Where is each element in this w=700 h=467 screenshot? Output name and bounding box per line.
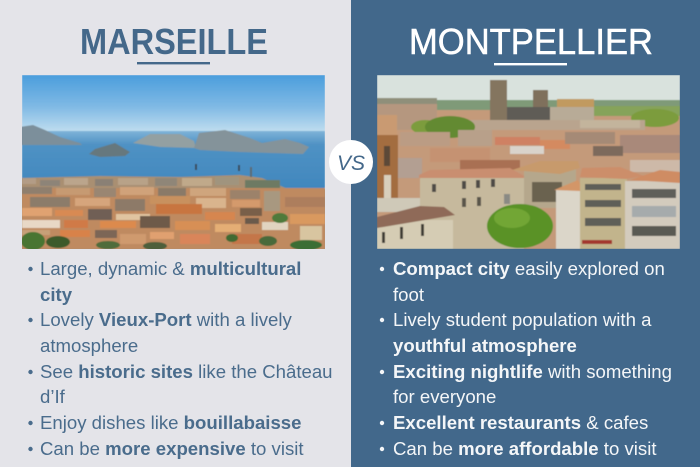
bullet list: Montpellier: Compact city easily explored on [393,258,665,279]
bullet list: Montpellier: Excellent restaurants & cafes [393,412,648,433]
photo: Montpellier cathedral and rooftops [377,75,680,249]
bullet list: Marseille: Enjoy dishes like bouillabaisse [40,412,301,433]
heading underline [137,62,210,64]
VS badge [329,140,373,184]
panel: Marseille [22,28,332,459]
heading: Montpellier: MONTPELLIER [409,21,653,62]
bullet list: Montpellier: Exciting nightlife with something [393,361,672,382]
VS badge: VS [337,152,365,175]
bullet list: Montpellier: Lively student population with a [393,309,652,330]
bullet list: Montpellier: youthful atmosphere [393,335,577,356]
bullet list: Marseille: atmosphere [40,335,138,356]
bullet list: Marseille: Can be more expensive to visit [40,438,304,459]
photo: Marseille coast and rooftops [20,75,327,251]
bullet list: Montpellier [380,258,672,459]
bullet list: Marseille: d’If [40,386,66,407]
panel: Montpellier [351,0,700,467]
bullet list: Marseille: Large, dynamic & multicultural [40,258,301,279]
bullet list: Marseille: Lovely Vieux-Port with a lively [40,309,293,330]
bullet list: Montpellier: Can be more affordable to visit [393,438,657,459]
bullet list: Montpellier: foot [393,284,425,305]
bullet list: Montpellier: for everyone [393,386,496,407]
bullet list: Marseille: city [40,284,73,305]
heading: Marseille: MARSEILLE [80,21,268,62]
heading underline [494,63,567,65]
bullet list: Marseille: See historic sites like the Château [40,361,333,382]
bullet list: Marseille [28,258,333,459]
